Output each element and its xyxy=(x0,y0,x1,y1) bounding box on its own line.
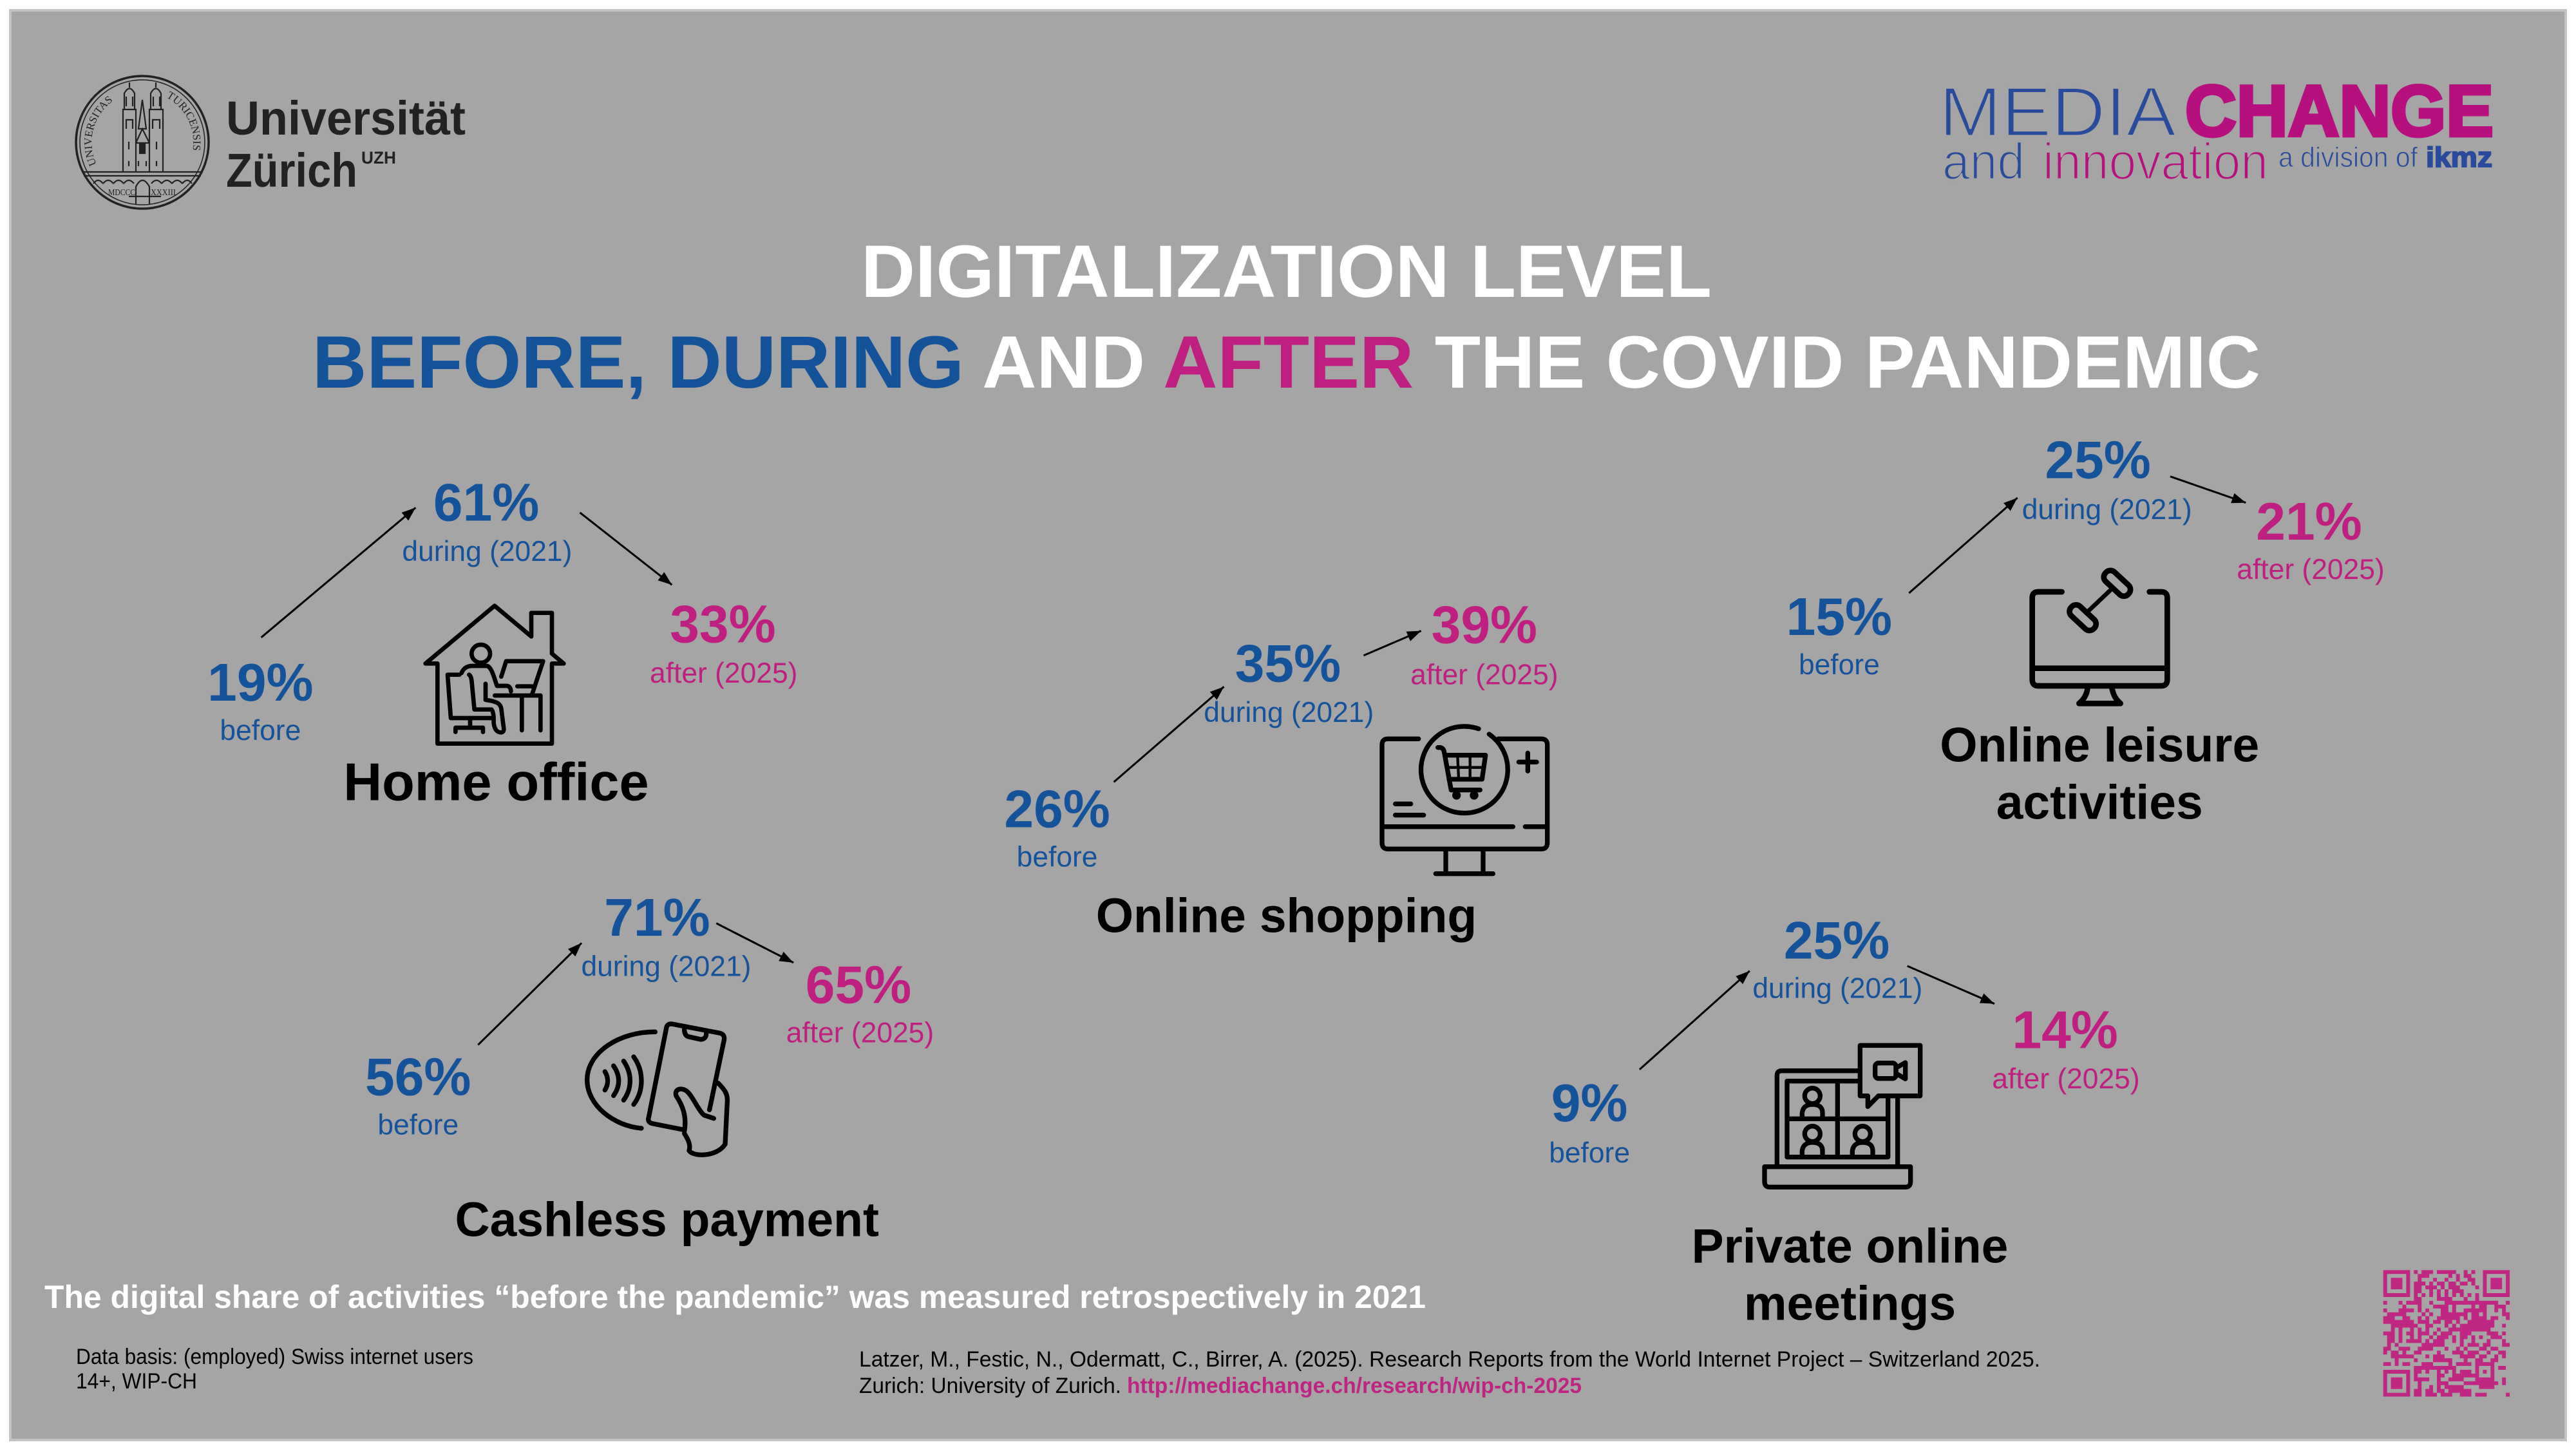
after value: 65% xyxy=(806,956,911,1014)
before value: before xyxy=(1799,649,1880,681)
after value xyxy=(786,956,934,1049)
data basis xyxy=(76,1345,473,1394)
during value: 61% xyxy=(433,474,539,533)
heading: Home office xyxy=(343,752,649,811)
after value: after (2025) xyxy=(1410,659,1558,690)
after value: after (2025) xyxy=(650,658,797,689)
arrow xyxy=(580,513,672,585)
logo: Media Change and innovation xyxy=(1939,71,2494,190)
heading: Online leisure xyxy=(1940,717,2259,772)
icon: university seal: UNIVERSITAS xyxy=(84,96,112,167)
arrow xyxy=(1909,498,2018,593)
heading: Online shopping xyxy=(1096,889,1477,943)
data basis: Data basis: (employed) Swiss internet users xyxy=(76,1345,473,1369)
during value xyxy=(402,474,572,567)
logo wordmark: Universität xyxy=(226,91,466,145)
after value xyxy=(1410,596,1558,690)
citation: http://mediachange.ch/research/wip-ch-2025 xyxy=(1127,1374,1582,1398)
panel: private online meetings xyxy=(1549,912,2140,1331)
arrow xyxy=(1908,966,1994,1004)
after value: after (2025) xyxy=(2237,554,2385,585)
before value xyxy=(365,1048,471,1141)
arrow xyxy=(261,507,415,638)
icon: online meeting xyxy=(1765,1045,1920,1187)
heading: meetings xyxy=(1744,1276,1956,1331)
after value xyxy=(650,595,797,689)
panel: home office xyxy=(207,474,797,811)
logo: Media Change and innovation: MEDIA xyxy=(1939,73,2176,151)
logo wordmark: UZH xyxy=(361,148,396,167)
logo: Media Change and innovation: CHANGE xyxy=(2185,71,2494,151)
before value: before xyxy=(1549,1137,1630,1169)
icon: university seal xyxy=(75,75,210,210)
during value xyxy=(1752,912,1922,1005)
during value xyxy=(581,889,751,982)
heading: Private online xyxy=(1692,1218,2008,1273)
during value: during (2021) xyxy=(402,536,572,567)
arrow xyxy=(2170,477,2246,503)
icon: contactless payment xyxy=(587,1024,727,1155)
during value: during (2021) xyxy=(1204,697,1374,728)
icon: university seal: XXXIII xyxy=(151,188,176,198)
before value xyxy=(1549,1074,1630,1169)
QR code xyxy=(2383,1272,2510,1395)
before value: 9% xyxy=(1551,1074,1627,1133)
arrow xyxy=(1114,687,1224,782)
before value: before xyxy=(1017,842,1097,873)
panel: online shopping xyxy=(1004,596,1558,943)
during value: during (2021) xyxy=(581,951,751,982)
title: DIGITALIZATION LEVEL xyxy=(861,231,1712,313)
panel: online leisure activities xyxy=(1786,431,2385,829)
logo wordmark: Zürich xyxy=(226,144,357,197)
arrow xyxy=(1640,971,1750,1070)
before value xyxy=(1786,588,1892,681)
arrow xyxy=(716,923,793,963)
during value xyxy=(1204,635,1374,728)
after value xyxy=(2237,493,2385,585)
after value: 33% xyxy=(670,595,776,654)
citation: Latzer, M., Festic, N., Odermatt, C., Birrer, A. (2025). Research Reports from the World Internet Project – Switzerland 2025. xyxy=(859,1347,2040,1372)
after value: after (2025) xyxy=(1992,1063,2140,1095)
title: BEFORE, DURING AND AFTER THE COVID PANDEMIC xyxy=(312,321,2260,404)
logo: Media Change and innovation: ikmz xyxy=(2426,142,2492,173)
before value: 56% xyxy=(365,1048,471,1106)
during value: during (2021) xyxy=(2022,494,2192,526)
before value: 19% xyxy=(207,654,314,712)
icon: university seal: TURICENSIS xyxy=(167,91,201,150)
after value: 14% xyxy=(2012,1001,2118,1060)
logo: Media Change and innovation: and xyxy=(1942,133,2025,190)
icon: online leisure xyxy=(2032,568,2167,703)
icon: online shopping xyxy=(1382,726,1548,874)
panel: cashless payment xyxy=(365,889,934,1247)
logo: Media Change and innovation: innovation xyxy=(2043,133,2268,190)
heading: activities xyxy=(1996,775,2203,829)
citation xyxy=(859,1347,2040,1398)
during value: 25% xyxy=(1784,912,1889,971)
before value xyxy=(207,654,314,746)
during value: 71% xyxy=(604,889,710,947)
icon: university seal: MDCCC xyxy=(108,188,135,198)
during value: 25% xyxy=(2045,431,2151,489)
logo: Universität Zürich xyxy=(75,75,466,210)
heading xyxy=(1940,717,2259,829)
after value xyxy=(1992,1001,2140,1095)
arrow xyxy=(1363,631,1421,656)
heading: Cashless payment xyxy=(455,1193,879,1247)
logo: Media Change and innovation: a division of xyxy=(2278,142,2418,173)
before value: 26% xyxy=(1004,780,1110,838)
note: retrospective measurement: The digital share of activities “before the pandemic” was measured retrospectively in 2021 xyxy=(44,1279,1426,1315)
before value: before xyxy=(220,715,301,746)
after value: 39% xyxy=(1432,596,1537,655)
data basis: 14+, WIP-CH xyxy=(76,1369,197,1394)
before value: before xyxy=(377,1109,459,1141)
icon: home office xyxy=(426,606,564,744)
logo wordmark xyxy=(226,91,466,197)
arrow xyxy=(478,943,582,1045)
title xyxy=(312,231,2260,404)
during value: 35% xyxy=(1235,635,1341,694)
heading xyxy=(1692,1218,2008,1331)
after value: after (2025) xyxy=(786,1018,934,1049)
during value xyxy=(2022,431,2192,526)
after value: 21% xyxy=(2256,493,2362,551)
citation: Zurich: University of Zurich. xyxy=(859,1374,1121,1398)
during value: during (2021) xyxy=(1752,973,1922,1005)
before value: 15% xyxy=(1786,588,1892,647)
before value xyxy=(1004,780,1110,873)
